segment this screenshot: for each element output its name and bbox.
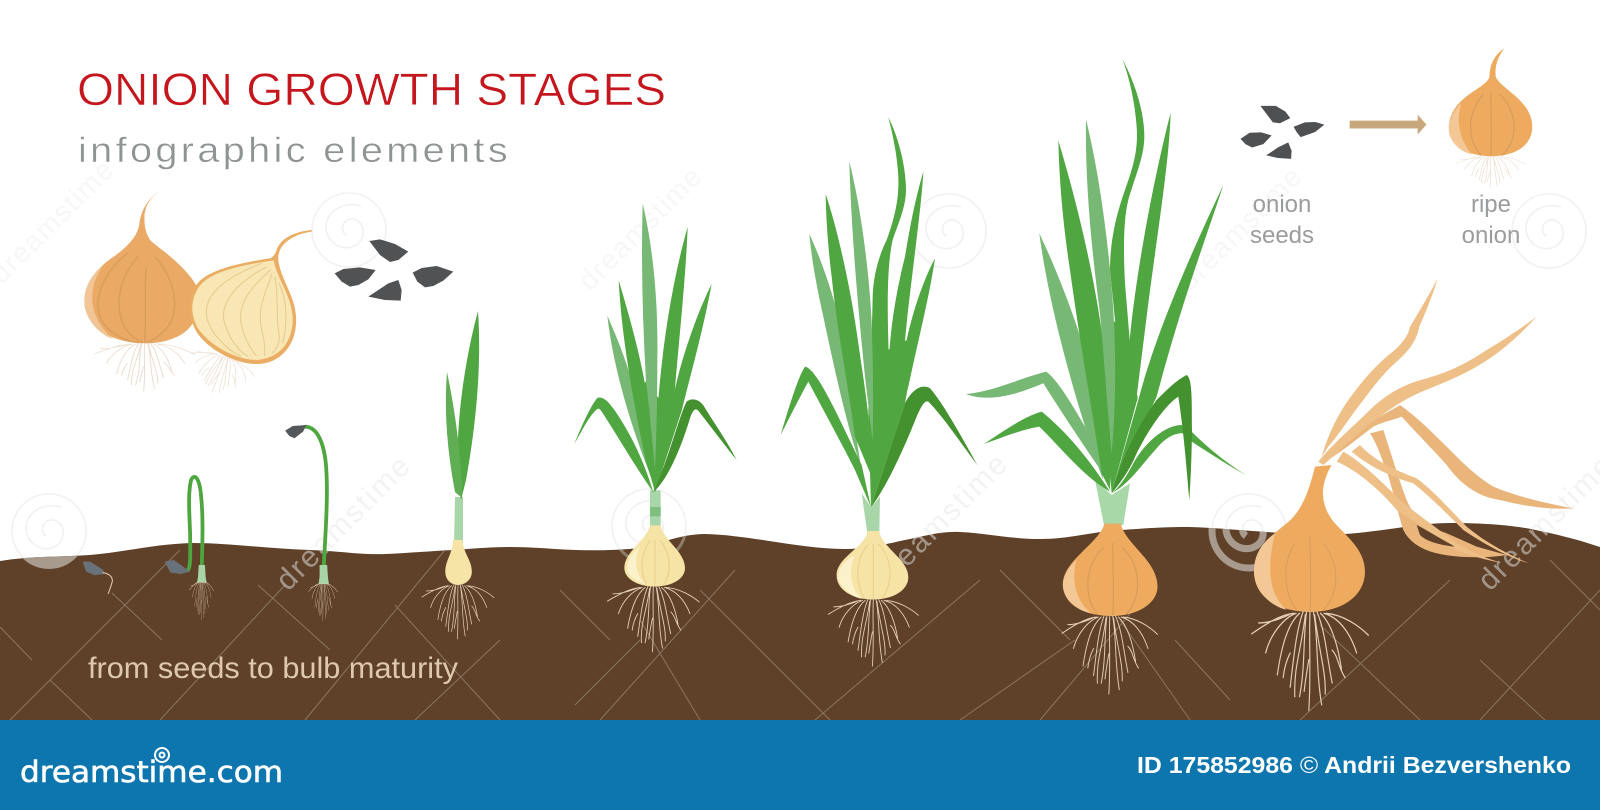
icon: dried leaves <box>1318 278 1573 563</box>
icon: roots <box>1062 616 1158 694</box>
legend: onion seeds, arrow, ripe onion <box>1240 49 1532 249</box>
icon: pale bulb <box>624 526 685 587</box>
icon: small seeds <box>1240 106 1324 159</box>
icon: sprout roots <box>308 583 338 620</box>
label: ripe onion: onion <box>1462 222 1520 249</box>
soil ground <box>0 523 1600 722</box>
icon: roots <box>422 585 494 639</box>
icon: roots <box>607 587 699 652</box>
icon: large seeds <box>335 239 453 301</box>
label: ripe onion: ripe <box>1471 191 1511 218</box>
stage 4: young plant with two leaves <box>422 311 494 639</box>
stage 2: hooked sprout <box>165 477 214 620</box>
watermark spirals on white <box>12 193 1586 568</box>
caption on soil: from seeds to bulb maturity <box>88 652 458 685</box>
stage 8: mature onion with dried leaves <box>1252 278 1573 710</box>
icon: ripe bulb <box>1063 524 1158 616</box>
watermark marks on soil <box>0 154 1600 720</box>
icon: roots of whole onion <box>95 343 195 391</box>
watermark marks on soil: dreamstime <box>572 161 707 296</box>
footer logo text: dreamstime.com <box>20 755 283 789</box>
title: ONION GROWTH STAGES <box>77 64 666 115</box>
stage 1: germinating seed <box>83 562 112 594</box>
icon: halved onion <box>190 230 312 364</box>
stage 5: plant with bulb forming <box>574 204 737 652</box>
stage 7: full plant with ripe bulb <box>966 59 1246 694</box>
stage 3: straightening sprout <box>285 425 338 620</box>
illustration: whole and halved onion <box>84 191 312 404</box>
arrow <box>1350 115 1426 135</box>
icon: small bulb <box>445 540 472 585</box>
watermark marks on soil: dreamstime <box>270 450 417 597</box>
icon: roots <box>1252 612 1368 710</box>
stage 6: taller plant with pale bulb <box>781 117 977 666</box>
icon: pale bulb <box>837 531 908 600</box>
watermark marks on soil: dreamstime <box>1172 161 1307 296</box>
footer bar <box>0 720 1600 810</box>
watermark marks on soil: dreamstime <box>867 448 1014 595</box>
icon: whole onion <box>84 191 197 343</box>
icon: sprout roots <box>189 582 214 620</box>
icon: mature bulb <box>1254 465 1365 612</box>
label: onion seeds: seeds <box>1250 222 1314 249</box>
subtitle: infographic elements <box>78 131 511 170</box>
icon: roots <box>828 600 918 666</box>
icon: ripe onion <box>1449 49 1532 187</box>
footer credit: ID 175852986 © Andrii Bezvershenko <box>1137 752 1571 778</box>
icon: logo spiral <box>155 748 169 762</box>
label: onion seeds: onion <box>1253 191 1311 218</box>
icon: roots of halved onion <box>180 345 258 404</box>
